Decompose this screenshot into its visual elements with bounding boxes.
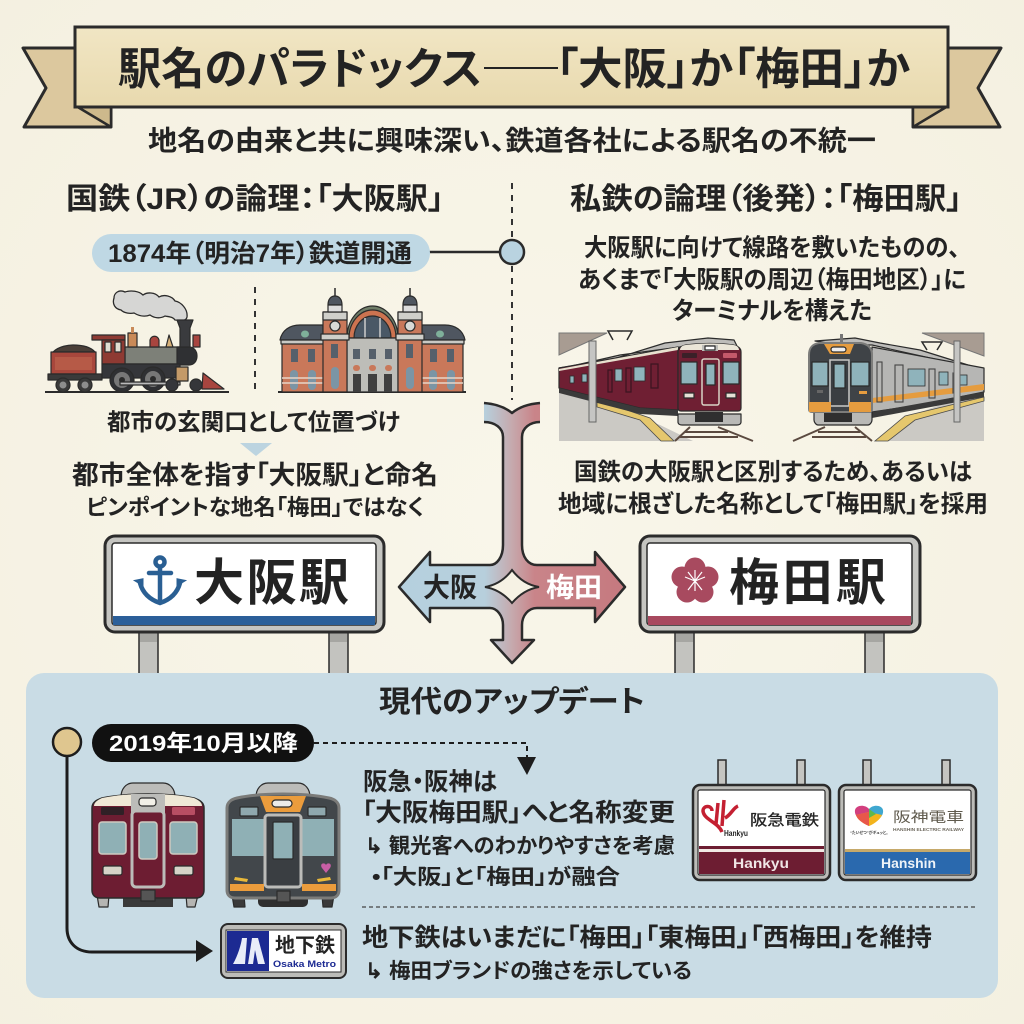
dashed divider [362,906,975,908]
icon: Osaka Metro logo [233,938,265,964]
station sign: Osaka [105,536,384,674]
sign: Hankyu: Hankyu [733,855,789,871]
sign: Hankyu [693,760,830,880]
sign: Hankyu: 阪急電鉄 [750,812,819,829]
station sign: Umeda: 梅田駅 [729,555,886,611]
icon: Hanshin heart logo [855,806,883,826]
icon: anchor [137,558,183,603]
sign: Hanshin: 阪神電車 [893,809,964,825]
icon: Hanshin train front [227,783,339,907]
small downward triangle [240,443,272,456]
sign: Hanshin [839,760,976,880]
sign: Hanshin: HANSHIN ELECTRIC RAILWAY [893,827,964,832]
rename text: 阪急・阪神は [363,768,497,796]
left text: naming: 都市全体を指す「大阪駅」と命名 [72,460,438,490]
diverging arrow [399,403,625,663]
timeline pill: 1874: 1874年（明治7年）鉄道開通 [108,240,412,268]
subway sign: Osaka Metro: 地下鉄 [275,934,335,957]
dashed arrow to rename text [314,743,536,775]
panel heading: 現代のアップデート [379,685,645,719]
left text: not Umeda: ピンポイントな地名「梅田」ではなく [86,495,424,520]
icon: Osaka station building [278,288,466,392]
dashed divider between locomotive and station [254,287,256,392]
rename text: ↳ 観光客へのわかりやすさを考慮 [365,835,675,858]
icon: Hanshin train at platform [793,333,984,441]
title banner: 「大阪」か「梅田」か [556,45,910,94]
rename text: 「大阪梅田駅」へと名称変更 [362,799,675,827]
date pill: October 2019 [92,724,314,762]
icon: Hankyu train front [92,783,204,907]
rename text: •「大阪」と「梅田」が融合 [372,865,620,889]
right explanation text: 大阪駅に向けて線路を敷いたものの、 [584,233,960,262]
right text: adoption of Umeda: 国鉄の大阪駅と区別するため、あるいは [574,459,972,486]
subway text [362,924,932,983]
station sign: Umeda [640,536,920,674]
right heading: private railway logic: 私鉄の論理（後発）：「梅田駅」 [570,183,962,216]
diverging arrow: 大阪 [423,573,477,603]
right explanation text [578,233,966,325]
subway sign: Osaka Metro [221,924,346,978]
center dashed divider [511,183,513,400]
right text: adoption of Umeda: 地域に根ざした名称として「梅田駅」を採用 [558,490,988,518]
timeline connector to subway sign [53,728,213,962]
sign: Hankyu: Hankyu [724,829,748,838]
date pill: October 2019: 2019年10月以降 [109,731,299,756]
icon: steam locomotive [45,291,229,392]
icon: Hankyu logo [703,800,738,832]
icon: plum blossom [672,558,718,602]
subway text: 地下鉄はいまだに「梅田」「東梅田」「西梅田」を維持 [362,924,932,952]
subway text: ↳ 梅田ブランドの強さを示している [365,959,692,983]
subtitle: 地名の由来と共に興味深い、鉄道各社による駅名の不統一 [148,125,876,156]
sign: Hanshin: Hanshin [881,855,936,871]
subway sign: Osaka Metro: Osaka Metro [273,959,337,969]
sign: Hanshin: “たいせつ”がギュッと。 [850,829,888,835]
diverging arrow: 梅田 [546,573,602,603]
panel: modern update [26,673,998,998]
timeline pill: 1874 [92,234,524,272]
right text: adoption of Umeda [558,459,988,518]
left text: gateway positioning: 都市の玄関口として位置づけ [107,409,400,435]
left heading: JR logic: 国鉄（JR）の論理：「大阪駅」 [66,183,444,216]
station sign: Osaka: 大阪駅 [194,555,349,611]
title banner [23,27,1001,127]
right explanation text: あくまで「大阪駅の周辺（梅田地区）」に [578,266,966,294]
title banner: 駅名のパラドックス [118,45,482,94]
icon: Hankyu train at platform [559,331,753,441]
rename text [362,768,675,889]
right explanation text: ターミナルを構えた [672,297,872,325]
